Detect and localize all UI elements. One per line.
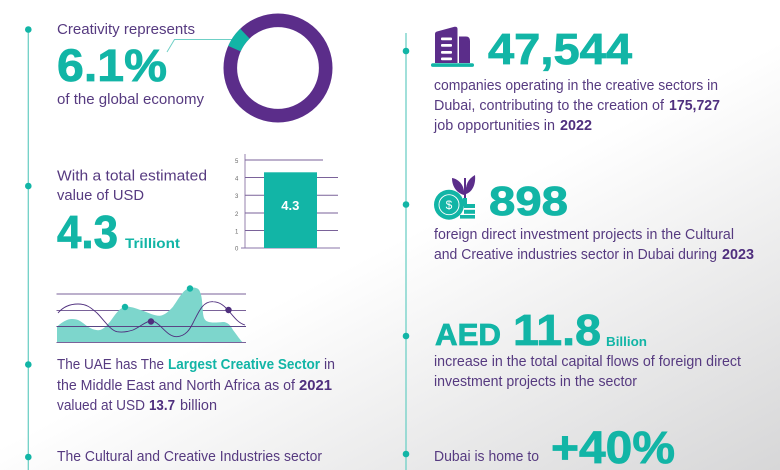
- text: UAE largest creative sector: [57, 356, 335, 414]
- text: FDI description: [434, 226, 754, 263]
- callout line: [167, 40, 232, 52]
- left timeline: [25, 26, 32, 470]
- text: UAE largest creative sector: valued at USD: [57, 397, 145, 414]
- icon: coin and plant: $: [446, 198, 453, 212]
- text: with a total estimated value of USD: With a total estimated: [57, 168, 207, 184]
- text: value of USD: value of USD: [57, 187, 144, 204]
- text: UAE largest creative sector: 13.7: [149, 397, 175, 414]
- donut chart: [230, 20, 326, 116]
- bar chart: 4: [235, 176, 239, 182]
- stat unit: Billion: Billion: [606, 334, 647, 349]
- text: capital flows description: [434, 353, 742, 390]
- stat: 4.3: 4.3: [57, 206, 118, 258]
- text: FDI description: foreign direct investment projects in the Cultural: [434, 226, 734, 243]
- stat: 11.8: 11.8: [513, 306, 601, 355]
- text: Dubai is home to: Dubai is home to: [434, 448, 539, 465]
- text: companies description: 175,727: [669, 97, 720, 114]
- text: cultural and creative industries: The Cultural and Creative Industries sector: [57, 448, 322, 465]
- panel: capital flows: [434, 306, 742, 390]
- stat: 898: 898: [489, 178, 568, 224]
- stat: 6.1%: 6.1%: [57, 40, 167, 91]
- icon: buildings: [431, 27, 474, 67]
- stat: 47,544: 47,544: [488, 25, 633, 74]
- text: companies description: 2022: [560, 117, 592, 134]
- text: FDI description: and Creative industries sector in Dubai during: [434, 246, 717, 263]
- text: of the global economy: of the global economy: [57, 91, 204, 108]
- text: UAE largest creative sector: billion: [180, 397, 217, 414]
- text: UAE largest creative sector: the Middle East and North Africa as of: [57, 377, 296, 394]
- text: UAE largest creative sector: The UAE has The: [57, 356, 164, 373]
- panel: largest creative sector: [56, 285, 335, 414]
- bar chart: 0: [235, 246, 239, 252]
- text: companies description: job opportunities in: [433, 117, 555, 134]
- text: creativity represents: Creativity represents: [57, 21, 195, 38]
- panel: total estimated value: [57, 154, 340, 258]
- text: FDI description: 2023: [722, 246, 754, 263]
- bar chart: 5: [235, 159, 239, 165]
- bar chart: 1: [235, 230, 239, 236]
- bar chart: [235, 154, 340, 252]
- area and line chart: [56, 285, 246, 342]
- bar chart: 3: [235, 194, 239, 200]
- panel: FDI projects: [434, 175, 754, 263]
- panel: Dubai is home to: [434, 422, 675, 470]
- text: companies description: companies operating in the creative sectors in: [434, 77, 718, 94]
- stat unit: Trilliont: Trilliont: [125, 235, 180, 251]
- bar chart: 2: [235, 212, 239, 218]
- panel: companies: [431, 25, 720, 134]
- panel: creativity share of global economy: [57, 20, 326, 116]
- bar chart: 4.3: [281, 198, 299, 213]
- text: capital flows description: investment projects in the sector: [434, 373, 637, 390]
- text: companies description: [433, 77, 720, 134]
- icon: coin and plant: [434, 175, 475, 220]
- text: UAE largest creative sector: Largest Creative Sector: [168, 356, 320, 373]
- text: companies description: Dubai, contributing to the creation of: [434, 97, 665, 114]
- right timeline: [403, 33, 409, 470]
- text: UAE largest creative sector: in: [324, 356, 335, 373]
- text: capital flows description: increase in the total capital flows of foreign direct: [434, 353, 742, 370]
- text: UAE largest creative sector: 2021: [299, 377, 332, 394]
- stat: AED: AED: [435, 317, 501, 352]
